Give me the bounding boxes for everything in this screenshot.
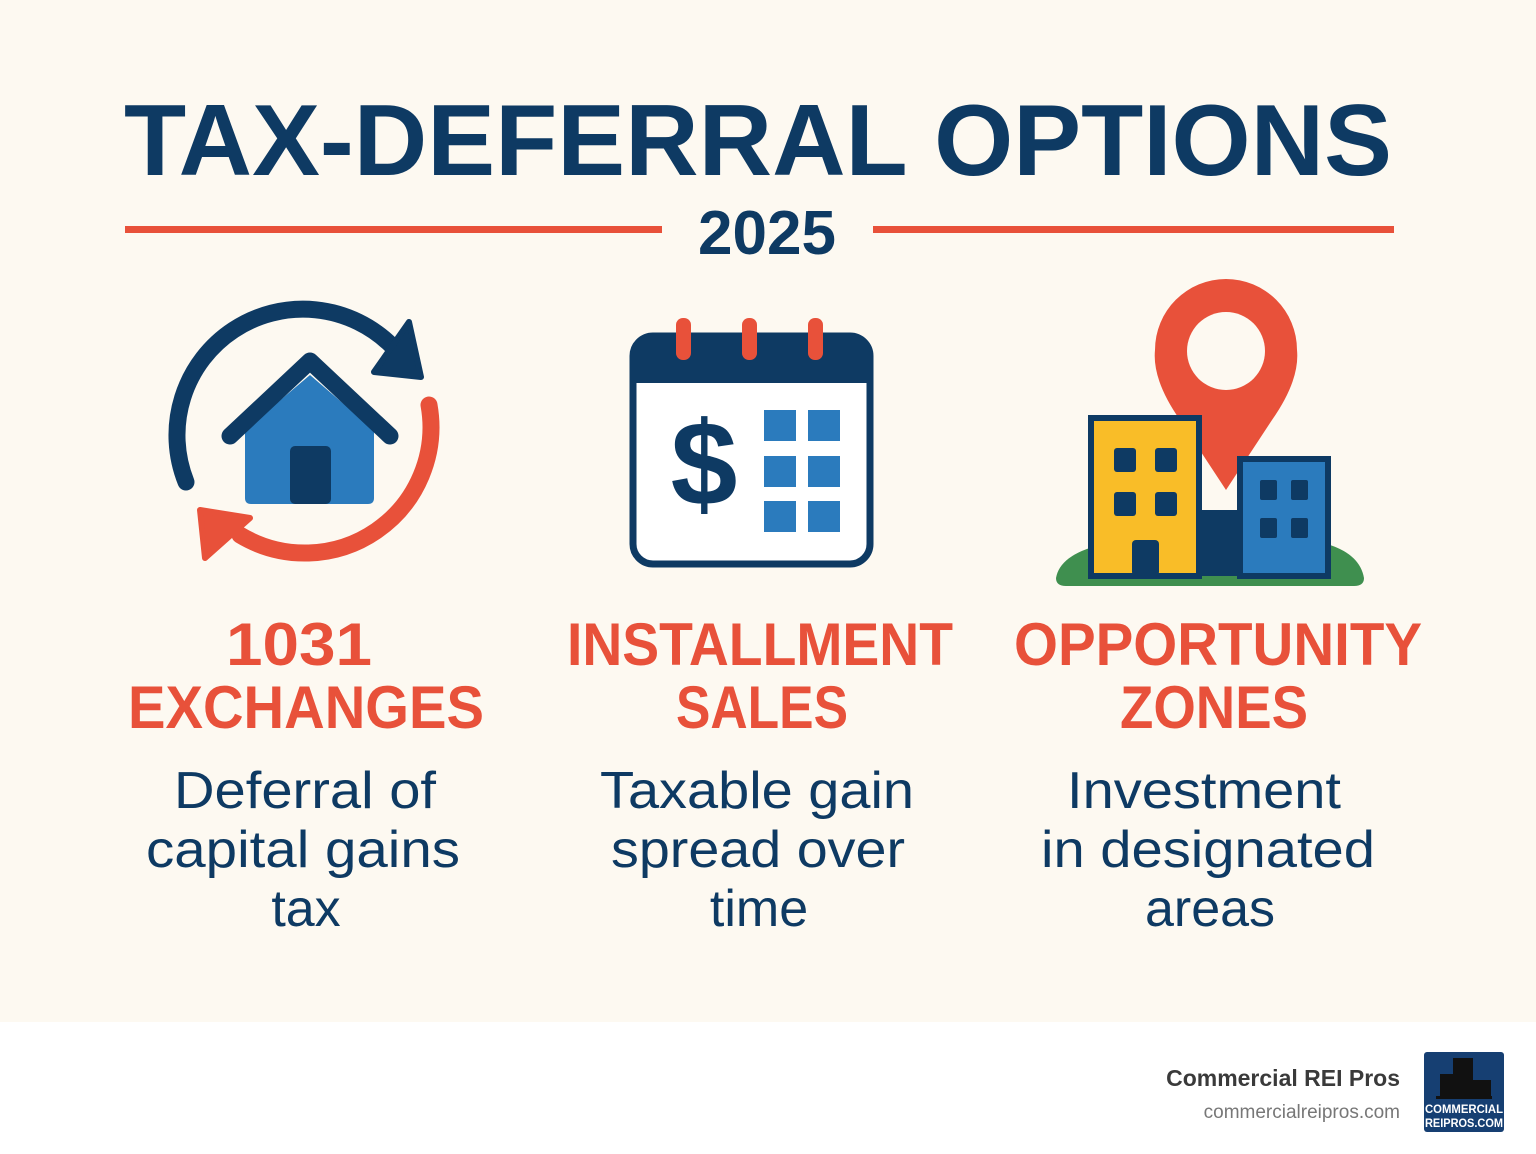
- description: installment: [600, 762, 914, 938]
- text: EXCHANGES: [128, 674, 484, 741]
- description: opportunity: [1041, 762, 1375, 938]
- description: installment: spread over: [611, 821, 905, 879]
- description: opportunity: Investment: [1067, 762, 1342, 820]
- heading: 1031 exchanges: 1031: [226, 611, 372, 678]
- description: 1031: Deferral of: [174, 762, 437, 820]
- icon: calendar with dollar: $: [671, 397, 737, 531]
- text: ZONES: [1120, 674, 1308, 741]
- footer logo: REIPROS.COM: [1425, 1116, 1503, 1130]
- title: TAX-DEFERRAL OPTIONS: [124, 85, 1392, 197]
- heading: opportunity zones: OPPORTUNITY: [1014, 611, 1422, 678]
- description: 1031: [146, 762, 460, 938]
- icon: buildings with location pin: [1056, 279, 1364, 586]
- icon: house with exchange arrows: [177, 309, 431, 558]
- footer brand text: [1166, 1065, 1400, 1123]
- text: SALES: [676, 674, 848, 741]
- footer brand text: Commercial REI Pros: [1166, 1065, 1400, 1091]
- subtitle year: 2025: [698, 199, 836, 268]
- icon: calendar with dollar: [633, 318, 870, 564]
- description: installment: time: [710, 880, 808, 938]
- description: opportunity: areas: [1145, 880, 1275, 938]
- footer logo: COMMERCIAL: [1425, 1102, 1503, 1116]
- footer logo: [1424, 1052, 1504, 1132]
- footer brand text: commercialreipros.com: [1204, 1102, 1400, 1123]
- description: 1031: capital gains: [146, 821, 460, 879]
- heading: installment sales: INSTALLMENT: [567, 611, 953, 678]
- description: installment: Taxable gain: [600, 762, 914, 820]
- description: opportunity: in designated: [1041, 821, 1375, 879]
- description: 1031: tax: [271, 880, 341, 938]
